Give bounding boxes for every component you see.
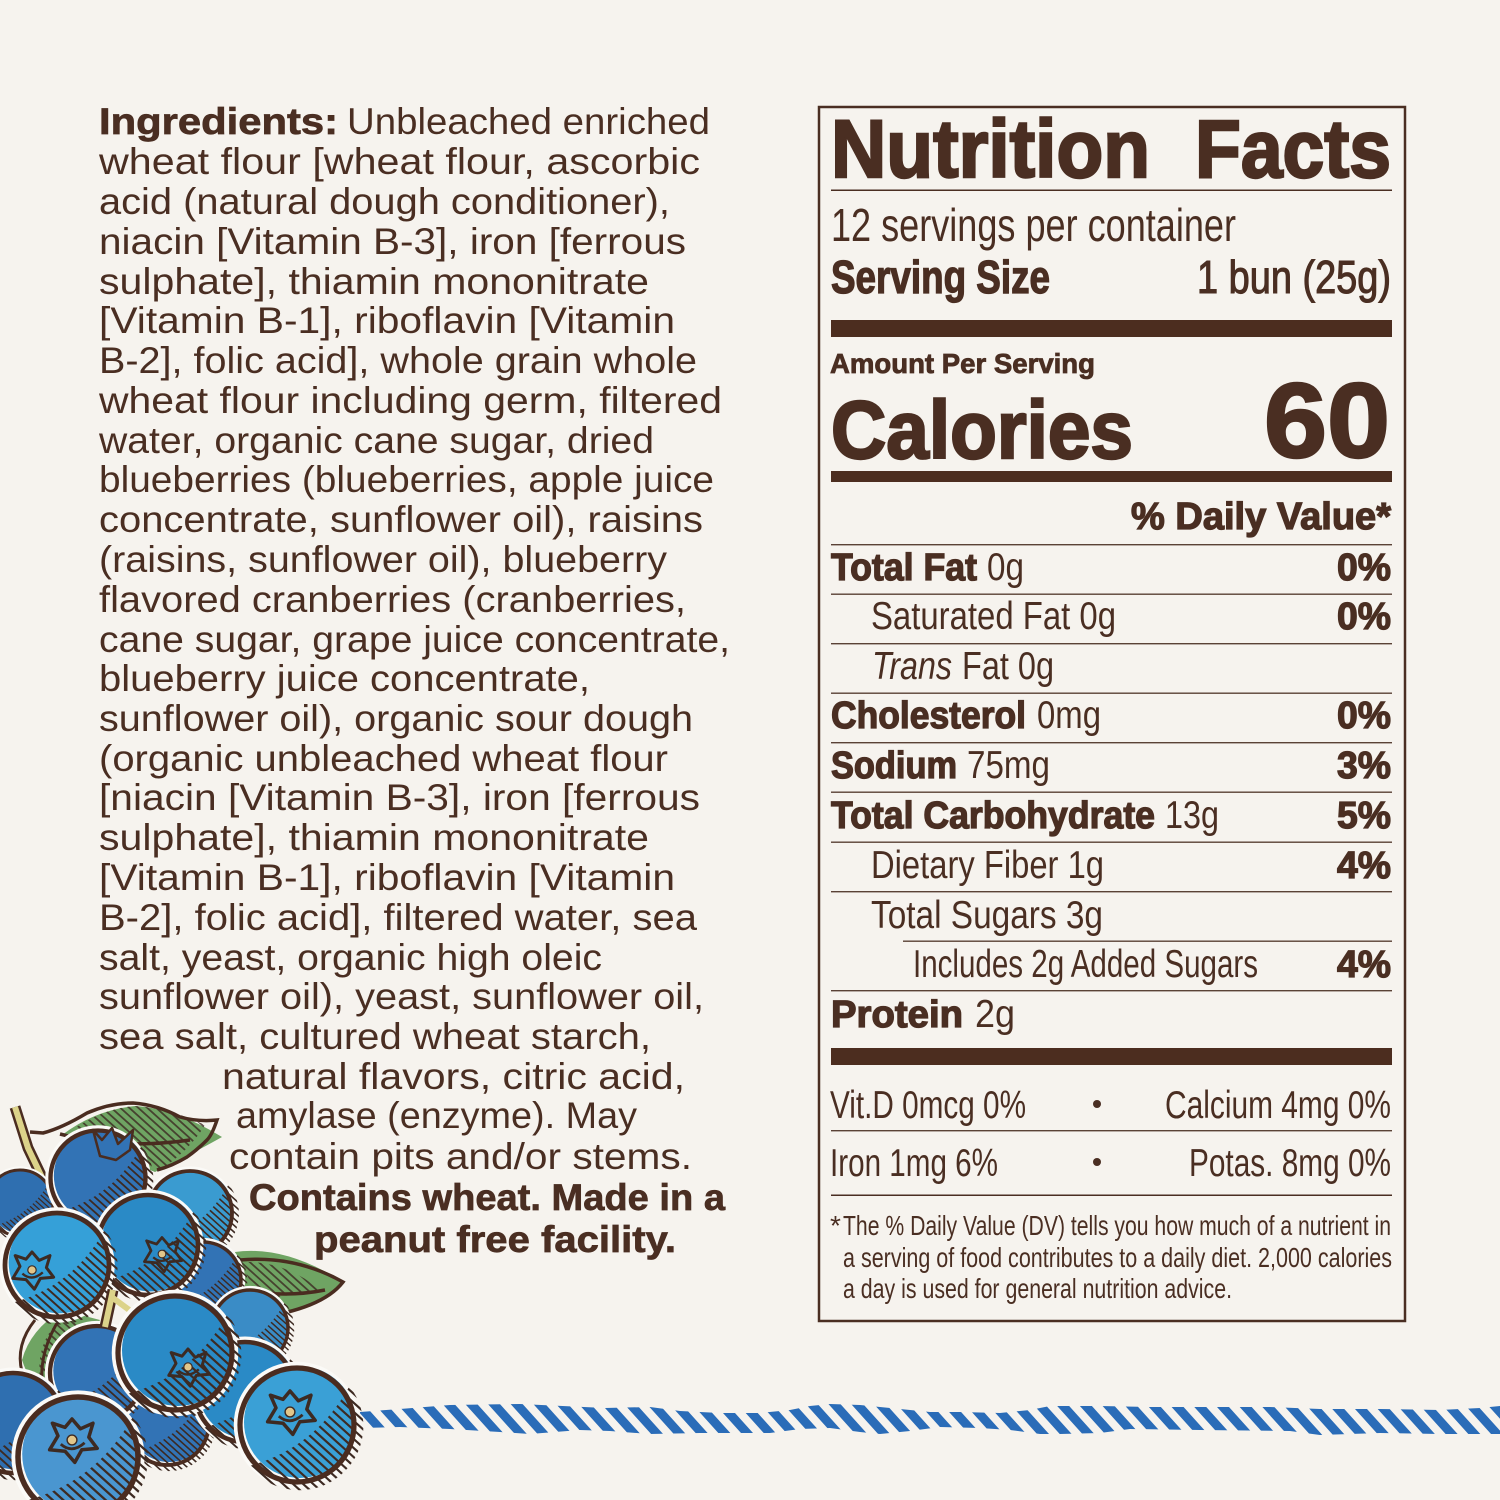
vitamins and minerals: Iron 1mg 6% xyxy=(830,1142,998,1185)
nutrient rows: Total Fat xyxy=(831,547,977,589)
nutrient rows: Includes 2g Added Sugars xyxy=(913,943,1258,986)
nutrient rows: Total Sugars 3g xyxy=(871,894,1103,937)
nutrient rows xyxy=(831,544,1392,1036)
nutrient rows: Dietary Fiber 1g xyxy=(871,844,1104,887)
nutrient rows: Protein xyxy=(831,994,963,1036)
ingredients text block: sulphate], thiamin mononitrate xyxy=(99,817,649,858)
ingredients text block: wheat flour [wheat flour, ascorbic xyxy=(98,141,700,182)
nutrient rows: 2g xyxy=(975,993,1015,1036)
daily value footnote: a day is used for general nutrition advice. xyxy=(843,1273,1232,1304)
nutrient rows: 75mg xyxy=(967,744,1050,787)
ingredients text block: Ingredients: xyxy=(99,101,338,142)
ingredients text block: Unbleached enriched xyxy=(347,101,710,142)
ingredients text block: sunflower oil), organic sour dough xyxy=(99,698,693,739)
servings information: Serving Size xyxy=(831,251,1050,303)
nutrition facts heading: Facts xyxy=(1195,104,1391,195)
ingredients text block: blueberries (blueberries, apple juice xyxy=(99,459,714,500)
ingredients text block: sulphate], thiamin mononitrate xyxy=(99,261,649,302)
ingredients text block: (organic unbleached wheat flour xyxy=(99,738,668,779)
nutrient rows: Trans xyxy=(872,645,952,688)
ingredients text block: amylase (enzyme). May xyxy=(236,1095,638,1136)
ingredients text block: contain pits and/or stems. xyxy=(229,1136,692,1177)
nutrition facts heading xyxy=(831,104,1391,195)
ingredients text block: B-2], folic acid], whole grain whole xyxy=(99,340,697,381)
ingredients text block: [niacin [Vitamin B-3], iron [ferrous xyxy=(99,777,700,818)
daily value footnote: * xyxy=(830,1210,841,1241)
nutrient rows: 3% xyxy=(1337,745,1391,787)
striped rope divider xyxy=(360,1404,1500,1435)
servings information xyxy=(831,199,1391,303)
nutrient rows: Fat 0g xyxy=(962,645,1054,688)
nutrient rows: Sodium xyxy=(831,745,957,787)
nutrient rows: 0mg xyxy=(1037,694,1101,737)
ingredients text block: sea salt, cultured wheat starch, xyxy=(99,1016,651,1057)
ingredients text block: B-2], folic acid], filtered water, sea xyxy=(99,897,697,938)
ingredients text block: natural flavors, citric acid, xyxy=(222,1056,685,1097)
berries: front row xyxy=(0,1349,366,1500)
berries: back row xyxy=(0,1114,249,1335)
ingredients text block: water, organic cane sugar, dried xyxy=(98,420,654,461)
ingredients text block: niacin [Vitamin B-3], iron [ferrous xyxy=(99,221,686,262)
ingredients text block: peanut free facility. xyxy=(314,1219,676,1260)
nutrient rows: 13g xyxy=(1165,794,1219,837)
nutrient rows: 0% xyxy=(1337,547,1391,589)
nutrient rows: 4% xyxy=(1337,845,1391,887)
ingredients text block: Contains wheat. Made in a xyxy=(249,1177,725,1218)
ingredients text block: salt, yeast, organic high oleic xyxy=(99,937,602,978)
stem: upper xyxy=(15,1107,48,1200)
leaf: lower left xyxy=(18,1316,100,1378)
nutrient rows: 5% xyxy=(1337,795,1391,837)
nutrient rows: Saturated Fat 0g xyxy=(871,595,1116,638)
ingredients text block: flavored cranberries (cranberries, xyxy=(99,579,686,620)
ingredients text block: [Vitamin B-1], riboflavin [Vitamin xyxy=(99,857,675,898)
nutrient rows: Total Carbohydrate xyxy=(831,795,1155,837)
ingredients text block: sunflower oil), yeast, sunflower oil, xyxy=(99,976,704,1017)
ingredients text block xyxy=(98,101,730,1260)
vitamins and minerals: Calcium 4mg 0% xyxy=(1165,1084,1391,1127)
ingredients text block: blueberry juice concentrate, xyxy=(99,658,590,699)
ingredients text block: [Vitamin B-1], riboflavin [Vitamin xyxy=(99,300,675,341)
servings information: 1 bun (25g) xyxy=(1197,251,1391,303)
calories block: 60 xyxy=(1264,362,1390,480)
ingredients text block: concentrate, sunflower oil), raisins xyxy=(99,499,703,540)
leaf: right xyxy=(235,1250,346,1314)
ingredients text block: wheat flour including germ, filtered xyxy=(98,380,722,421)
leaf: top xyxy=(30,1101,222,1172)
nutrient rows: 0% xyxy=(1337,596,1391,638)
ingredients text block: (raisins, sunflower oil), blueberry xyxy=(99,539,668,580)
nutrient rows: 0% xyxy=(1337,695,1391,737)
nutrient rows: Cholesterol xyxy=(831,695,1026,737)
ingredients text block: cane sugar, grape juice concentrate, xyxy=(99,619,730,660)
nutrition facts heading: Nutrition xyxy=(831,104,1150,195)
calories block: Amount Per Serving xyxy=(830,348,1095,379)
nutrient rows: 4% xyxy=(1337,944,1391,986)
calories block xyxy=(830,348,1390,480)
nutrient rows: 0g xyxy=(987,546,1024,589)
servings information: 12 servings per container xyxy=(831,199,1236,251)
berries: middle row xyxy=(40,1277,305,1479)
blueberry illustration xyxy=(0,1062,366,1500)
daily value footnote xyxy=(830,1210,1392,1304)
daily value header: % Daily Value* xyxy=(1131,496,1391,538)
vitamins and minerals xyxy=(830,1084,1392,1196)
vitamins and minerals: Potas. 8mg 0% xyxy=(1189,1142,1391,1185)
ingredients text block: acid (natural dough conditioner), xyxy=(99,181,670,222)
vitamins and minerals: Vit.D 0mcg 0% xyxy=(830,1084,1026,1127)
nutrition facts panel xyxy=(819,104,1405,1321)
calories block: Calories xyxy=(831,385,1133,476)
